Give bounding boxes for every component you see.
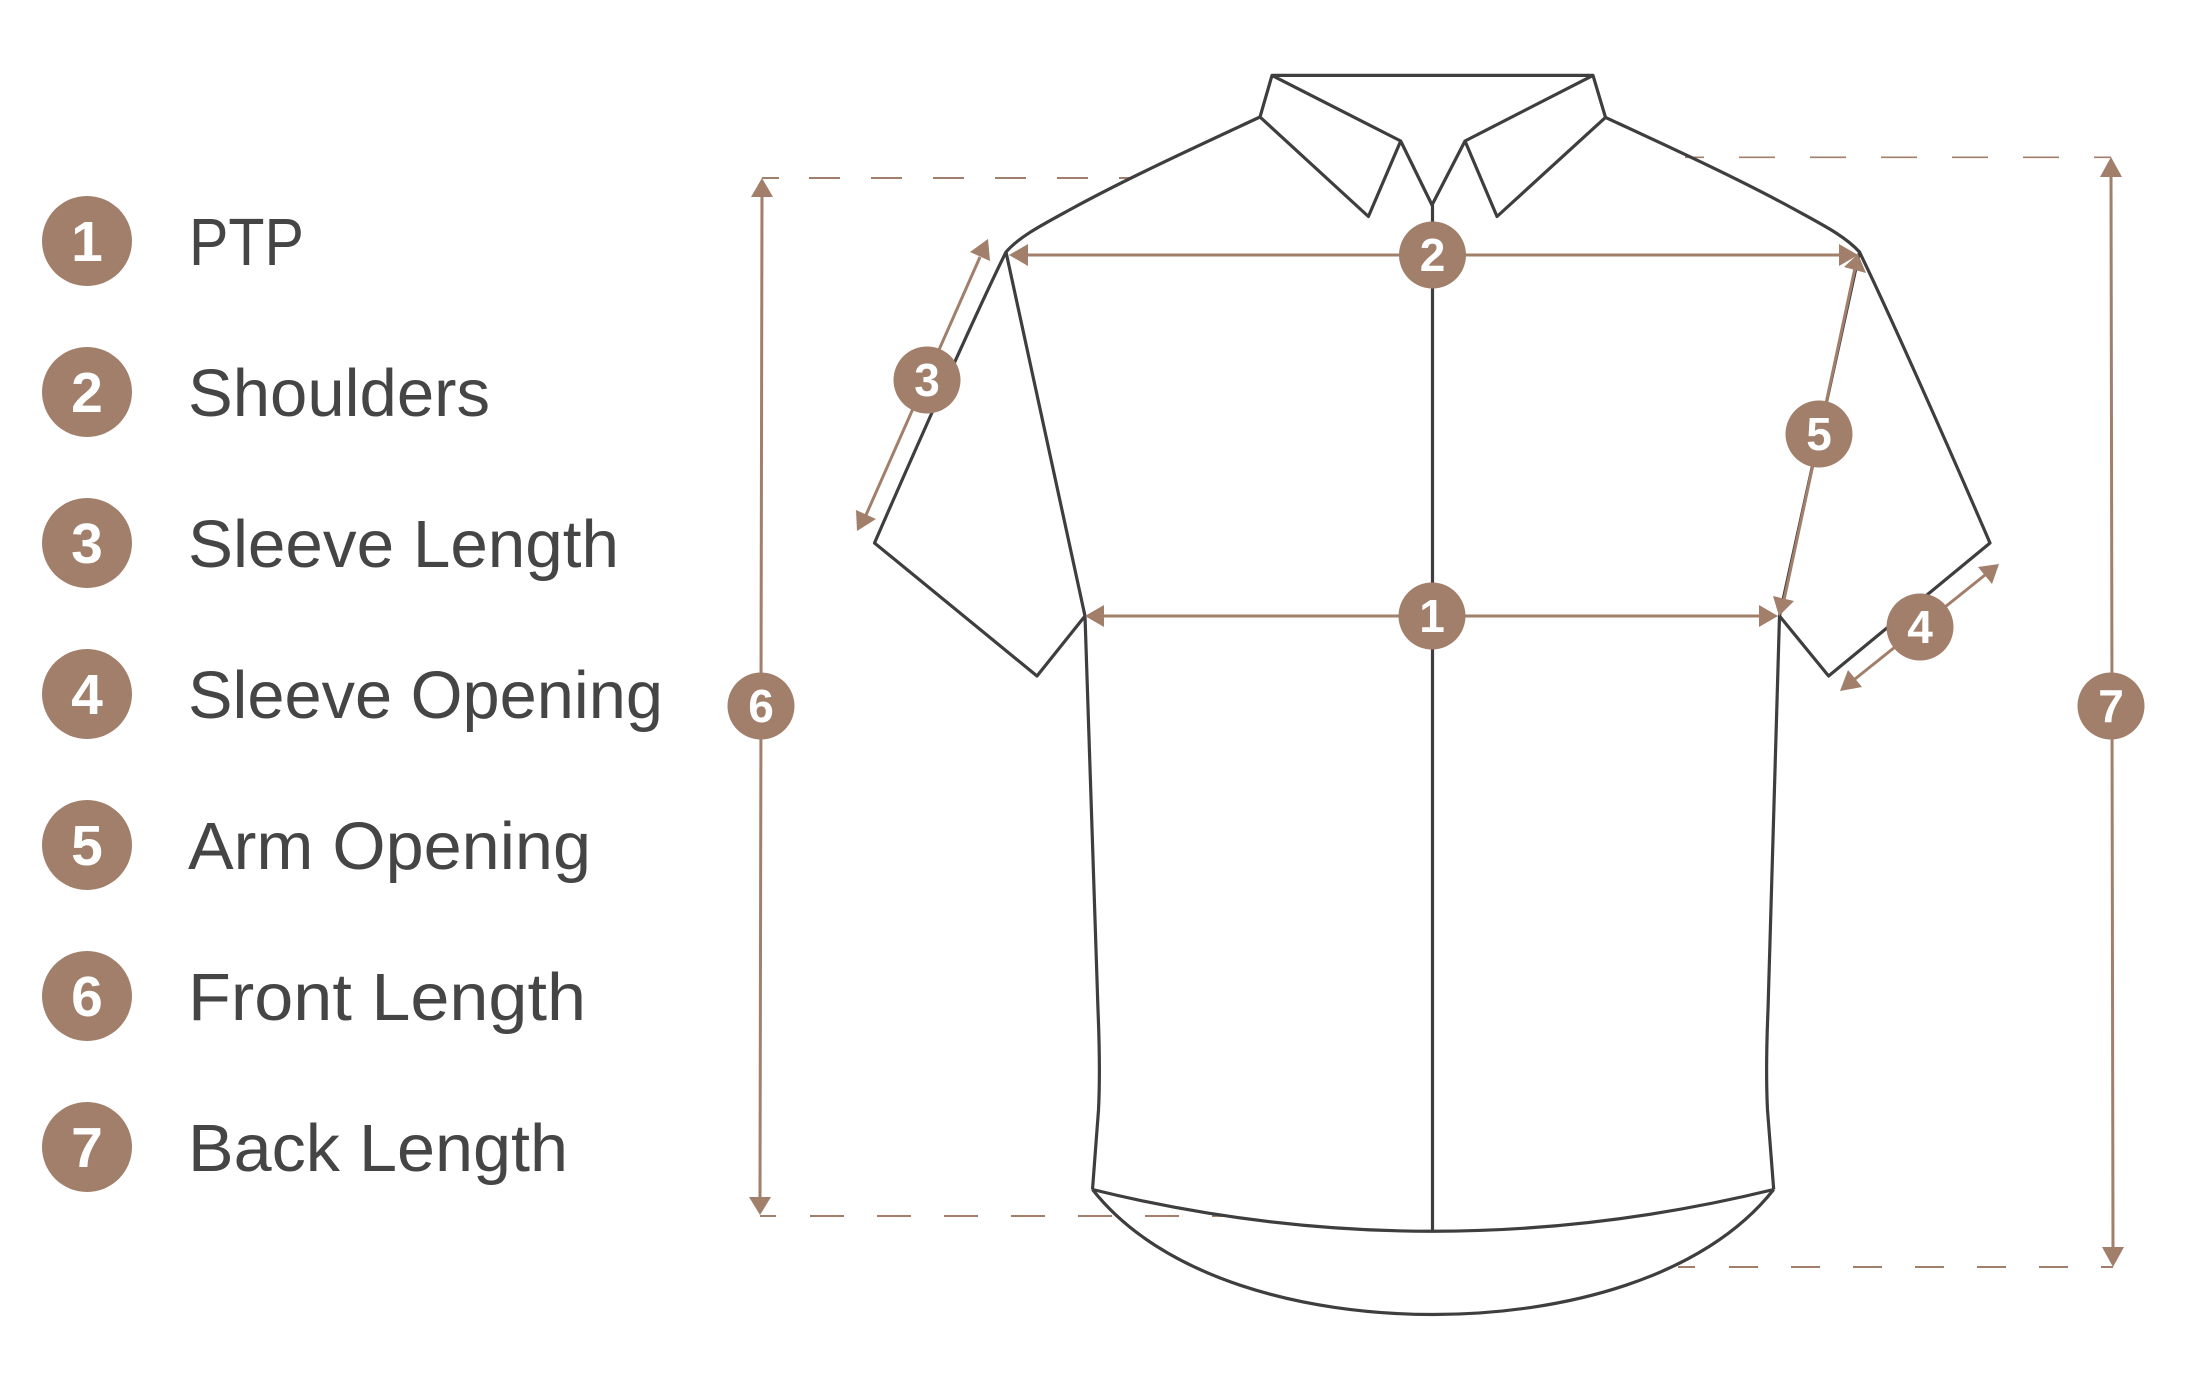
legend item 2: Shoulders: 2 — [71, 361, 103, 425]
badge 6 — [728, 672, 794, 740]
arrow 1: PTP — [1085, 605, 1778, 627]
shoulders and sleeves — [874, 117, 1990, 676]
legend item 3: Sleeve Length — [42, 498, 619, 588]
legend item 5: Arm Opening — [42, 800, 591, 890]
legend item 4: Sleeve Opening: 4 — [71, 663, 103, 727]
badge 4: 4 — [1907, 601, 1933, 653]
legend item 2: Shoulders: Shoulders — [188, 356, 490, 431]
badge 6: 6 — [748, 680, 774, 732]
badge 2 — [1399, 222, 1466, 288]
legend — [42, 196, 663, 1192]
legend item 2: Shoulders — [42, 347, 490, 437]
badge 5 — [1786, 400, 1852, 468]
legend item 4: Sleeve Opening — [42, 649, 663, 739]
badge 5: 5 — [1806, 408, 1832, 460]
badge 2: 2 — [1420, 229, 1445, 281]
badge 1: 1 — [1419, 590, 1445, 642]
arrow 2: shoulders — [1009, 244, 1858, 266]
arrow 3: sleeve length — [856, 239, 990, 531]
legend item 6: Front Length: 6 — [71, 965, 103, 1029]
legend item 1: PTP: 1 — [71, 210, 103, 274]
centre placket — [1431, 205, 1434, 1231]
badge 4 — [1886, 594, 1954, 660]
badge 7: 7 — [2098, 680, 2124, 732]
badge 3: 3 — [914, 354, 940, 406]
legend item 6: Front Length: Front Length — [188, 960, 586, 1035]
legend item 7: Back Length: Back Length — [188, 1111, 568, 1186]
legend item 4: Sleeve Opening: Sleeve Opening — [188, 658, 663, 733]
legend item 1: PTP: PTP — [189, 205, 304, 280]
legend item 1: PTP — [42, 196, 304, 286]
badge 7 — [2078, 672, 2144, 740]
collar — [1260, 75, 1606, 217]
legend item 6: Front Length — [42, 951, 586, 1041]
number badges on shirt — [728, 222, 2144, 740]
legend item 5: Arm Opening: Arm Opening — [188, 809, 591, 884]
arrow 4: sleeve opening — [1840, 564, 1999, 691]
legend item 5: Arm Opening: 5 — [71, 814, 103, 878]
legend item 7: Back Length: 7 — [71, 1116, 103, 1180]
arrow 6: front length — [749, 178, 773, 1215]
legend item 3: Sleeve Length: Sleeve Length — [188, 507, 619, 582]
back hem — [1092, 1190, 1774, 1314]
legend item 3: Sleeve Length: 3 — [71, 512, 103, 576]
shirt outline — [874, 75, 1990, 1314]
badge 1 — [1398, 582, 1466, 650]
badge 3 — [894, 346, 960, 414]
front hem — [1092, 1190, 1774, 1231]
legend item 7: Back Length — [42, 1102, 568, 1192]
dashed guide lines — [760, 157, 2113, 1267]
arrow 5: arm opening — [1773, 254, 1866, 616]
arrow 7: back length — [2100, 157, 2124, 1267]
measurement arrows — [749, 157, 2124, 1267]
body sides — [1085, 616, 1780, 1190]
